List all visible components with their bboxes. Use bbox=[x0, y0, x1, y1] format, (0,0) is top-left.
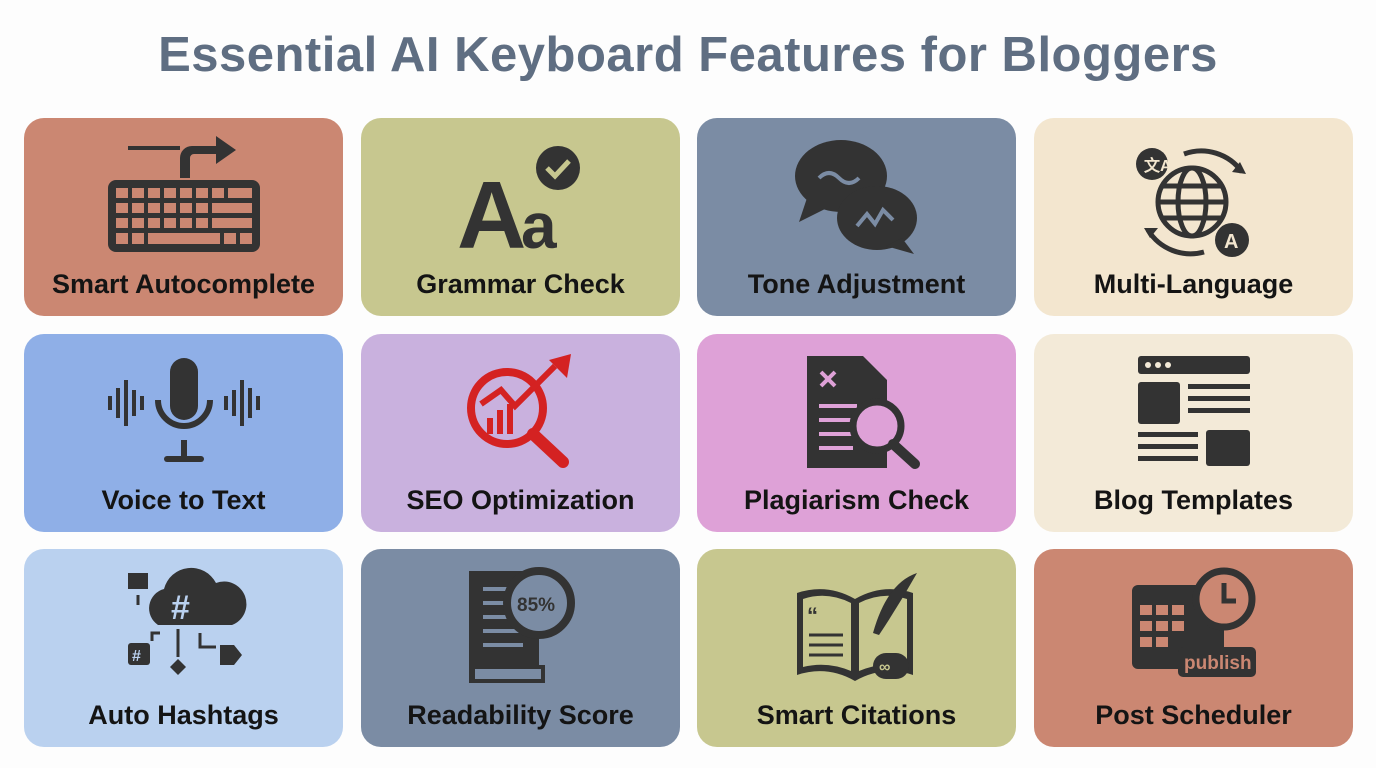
icon: hashtag cloud bbox=[128, 568, 246, 675]
icon: Aa with check bbox=[457, 146, 580, 269]
icon: magnifier with chart bbox=[467, 354, 571, 468]
card: Blog Templates: Blog Templates bbox=[1094, 485, 1293, 515]
icon: page layout bbox=[1138, 356, 1250, 466]
title: Essential AI Keyboard Features for Bloggers bbox=[158, 28, 1218, 82]
card: Auto Hashtags bbox=[24, 549, 343, 747]
icon: open book with quill and link: “ bbox=[807, 603, 818, 628]
card: Voice to Text bbox=[24, 334, 343, 532]
icon: Aa with check: a bbox=[521, 190, 557, 262]
icon: calendar, clock, publish: publish bbox=[1184, 653, 1252, 674]
icon: book with 85% gauge: 85% bbox=[517, 595, 555, 616]
icon: document with magnifier bbox=[807, 356, 920, 469]
card: Multi-Language: Multi-Language bbox=[1094, 269, 1293, 299]
card: SEO Optimization: SEO Optimization bbox=[406, 485, 634, 515]
card: Voice to Text: Voice to Text bbox=[101, 485, 266, 515]
card: Tone Adjustment: Tone Adjustment bbox=[748, 269, 965, 299]
icon: keyboard with arrow bbox=[108, 136, 260, 252]
card: Grammar Check: Grammar Check bbox=[416, 269, 625, 299]
card: Grammar Check bbox=[361, 118, 680, 316]
card: Smart Autocomplete bbox=[24, 118, 343, 316]
icon: book with 85% gauge bbox=[469, 567, 575, 683]
card: Plagiarism Check: Plagiarism Check bbox=[744, 485, 969, 515]
card: Post Scheduler: Post Scheduler bbox=[1095, 700, 1292, 730]
card: Auto Hashtags: Auto Hashtags bbox=[88, 700, 279, 730]
card: Tone Adjustment bbox=[697, 118, 1016, 316]
icon: hashtag cloud: # bbox=[132, 648, 141, 665]
card: Smart Citations bbox=[697, 549, 1016, 747]
icon: globe with translate: A bbox=[1224, 231, 1238, 253]
card: Smart Autocomplete: Smart Autocomplete bbox=[52, 269, 315, 299]
icon: speech bubbles bbox=[795, 140, 917, 254]
card: Readability Score bbox=[361, 549, 680, 747]
icon: Aa with check: A bbox=[457, 162, 526, 269]
card: Smart Citations: Smart Citations bbox=[757, 700, 956, 730]
icon: globe with translate: 文A bbox=[1144, 156, 1172, 175]
card: Blog Templates bbox=[1034, 334, 1353, 532]
icon: globe with translate bbox=[1136, 148, 1249, 257]
icon: hashtag cloud: # bbox=[171, 589, 190, 627]
card: Readability Score: Readability Score bbox=[407, 700, 634, 730]
card: SEO Optimization bbox=[361, 334, 680, 532]
icon: open book with quill and link bbox=[797, 573, 917, 681]
card: Plagiarism Check bbox=[697, 334, 1016, 532]
icon: open book with quill and link: ∞ bbox=[879, 659, 890, 676]
icon: microphone with sound waves bbox=[108, 358, 260, 462]
card: Post Scheduler bbox=[1034, 549, 1353, 747]
card: Multi-Language bbox=[1034, 118, 1353, 316]
icon: calendar, clock, publish bbox=[1132, 568, 1256, 677]
